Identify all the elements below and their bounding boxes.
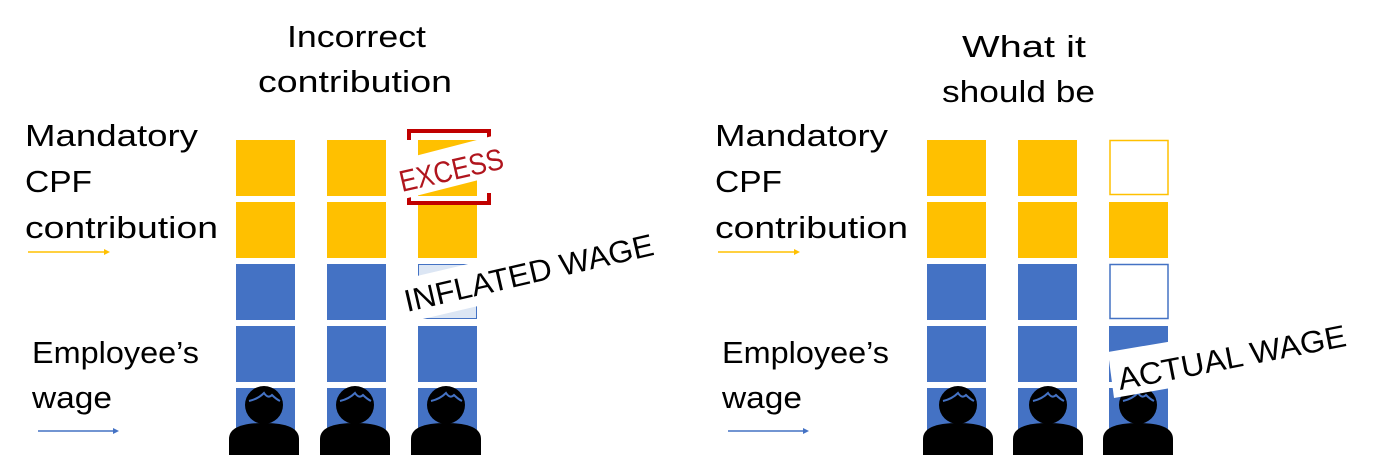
arrow: blue left [38,428,119,434]
heading: incorrect contribution: contribution [258,64,452,99]
label: employee's wage (left): Employee’s [32,335,199,370]
callout: actual wage: ACTUAL WAGE [1115,318,1349,397]
label: employee's wage (left): wage [31,380,112,415]
label: employee's wage (right): Employee’s [722,335,889,370]
heading: what it should be: should be [942,74,1095,109]
arrow: yellow right [718,249,800,255]
label: mandatory CPF contribution (right): CPF [715,164,782,199]
stamp: excess: EXCESS [396,143,507,199]
arrow: blue right [728,428,809,434]
label: employee's wage (right): wage [721,380,802,415]
arrow: yellow left [28,249,110,255]
label: mandatory CPF contribution (left): contribution [25,210,218,245]
chart: correct columns [923,140,1173,455]
label: mandatory CPF contribution (right): contribution [715,210,908,245]
chart: incorrect columns [229,140,481,455]
heading: what it should be: What it [962,29,1086,64]
heading: incorrect contribution: Incorrect [287,19,426,54]
label: mandatory CPF contribution (left): CPF [25,164,92,199]
callout: inflated wage: INFLATED WAGE [401,227,657,319]
label: mandatory CPF contribution (right): Mandatory [715,118,889,153]
label: mandatory CPF contribution (left): Mandatory [25,118,199,153]
